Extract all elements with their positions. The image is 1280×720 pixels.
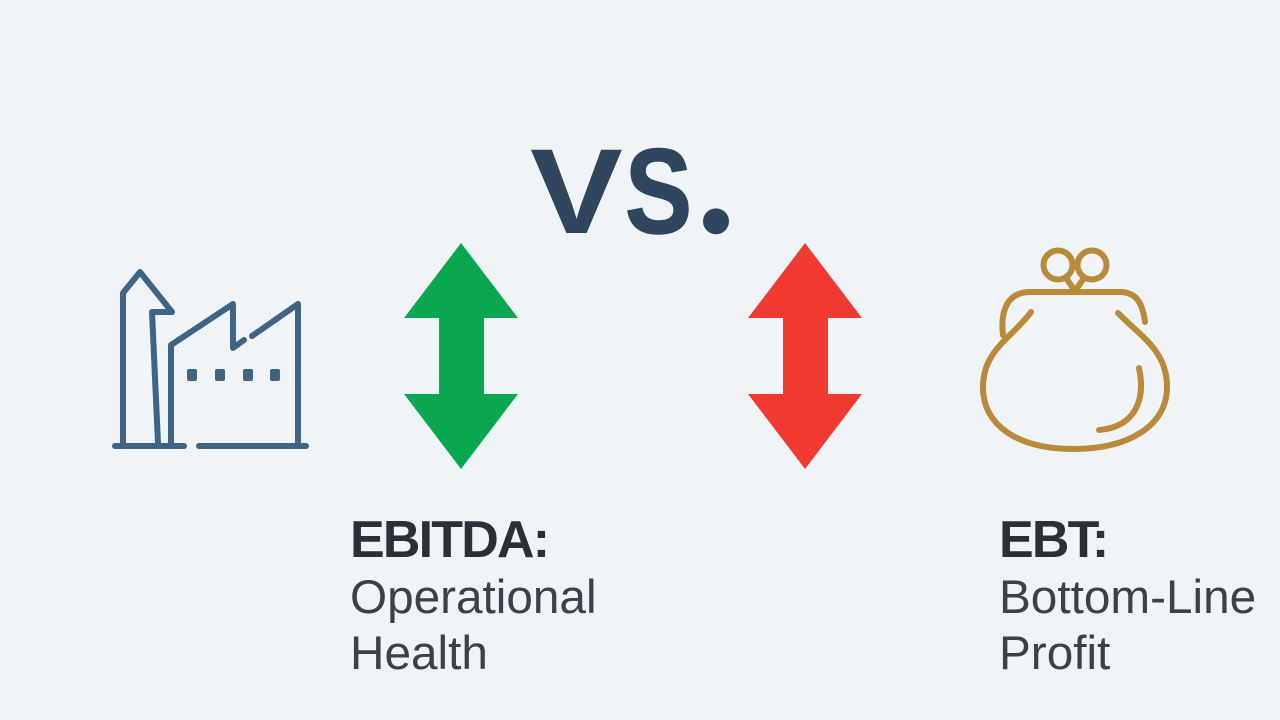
title: VS.: V xyxy=(530,123,623,259)
text block: EBT label: Bottom-Line xyxy=(999,570,1256,624)
text block: EBT label xyxy=(999,511,1256,680)
icon: factory xyxy=(115,272,306,446)
arrow: red up and down xyxy=(748,243,862,469)
title: VS.: S xyxy=(625,123,692,259)
text block: EBT label: EBT: xyxy=(999,511,1107,569)
text block: EBITDA label: Operational xyxy=(350,570,597,624)
text block: EBITDA label: EBITDA: xyxy=(350,511,548,569)
text block: EBITDA label xyxy=(350,511,597,680)
text block: EBT label: Profit xyxy=(999,626,1110,680)
text block: EBITDA label: Health xyxy=(350,626,488,680)
title: VS.: . xyxy=(696,88,736,266)
title: VS. xyxy=(530,88,736,266)
icon: coin purse xyxy=(983,250,1167,449)
arrow: green up and down xyxy=(404,243,518,469)
